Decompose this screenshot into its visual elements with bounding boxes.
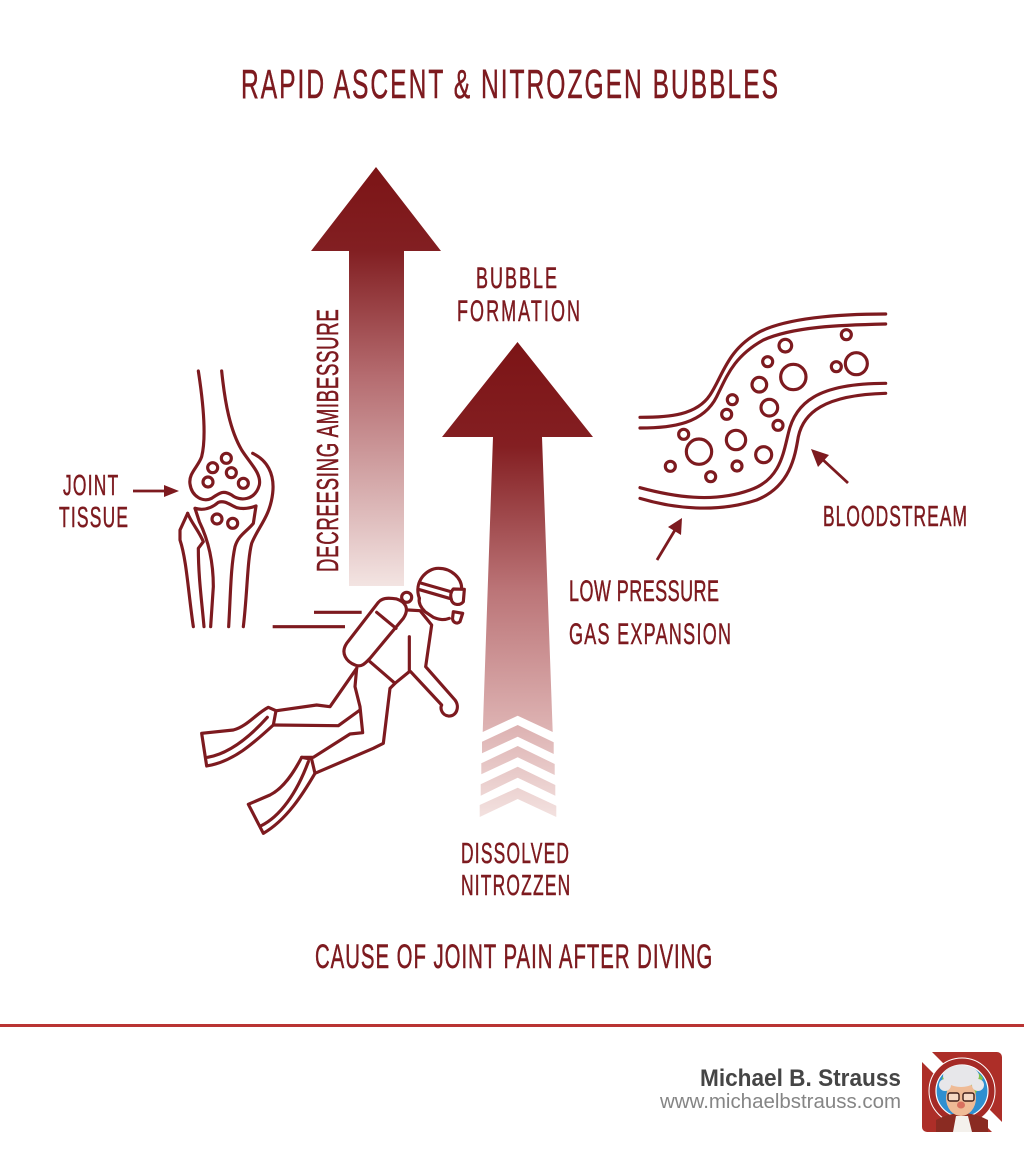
label: bloodstream: BLOODSTREAM	[823, 501, 967, 533]
label: gas expansion: GAS EXPANSION	[569, 619, 731, 651]
label: decreasing ambient pressure: DECREESING AMIBESSURE	[311, 309, 345, 572]
arrow: to bloodstream	[811, 449, 848, 483]
label: low pressure: LOW PRESSURE	[569, 576, 719, 608]
title: RAPID ASCENT & NITROZGEN BUBBLES	[241, 62, 778, 108]
legs	[273, 668, 363, 757]
label: bubble formation: FORMATION	[457, 296, 580, 328]
footer website: www.michaelbstrauss.com	[659, 1091, 901, 1113]
arrow: dissolved nitrogen rising	[442, 342, 593, 817]
logo	[922, 1052, 1002, 1132]
arrow: decreasing ambient pressure	[311, 167, 441, 586]
head and mask	[418, 568, 464, 623]
fins	[202, 707, 315, 833]
label: dissolved nitrogen	[461, 838, 570, 902]
icon: knee joint	[180, 371, 273, 627]
arrow: to joint	[133, 485, 179, 497]
icon: diver	[202, 568, 464, 833]
label: bubble formation: BUBBLE	[476, 263, 557, 295]
torso and arm	[315, 610, 457, 773]
caption: CAUSE OF JOINT PAIN AFTER DIVING	[315, 938, 712, 975]
label: joint tissue: TISSUE	[59, 502, 128, 534]
label: joint tissue: JOINT	[63, 470, 118, 502]
arrow: to vessel wall	[657, 518, 682, 560]
air tank	[344, 592, 412, 666]
footer author name: Michael B. Strauss	[700, 1065, 901, 1092]
label: dissolved nitrogen: NITROZZEN	[461, 870, 570, 902]
speed lines	[273, 612, 362, 627]
label: dissolved nitrogen: DISSOLVED	[461, 838, 569, 870]
label: bubble formation	[457, 263, 580, 328]
label: joint tissue	[59, 470, 128, 534]
icon: blood vessel with bubbles	[640, 314, 886, 508]
footer rule	[0, 1024, 1024, 1027]
